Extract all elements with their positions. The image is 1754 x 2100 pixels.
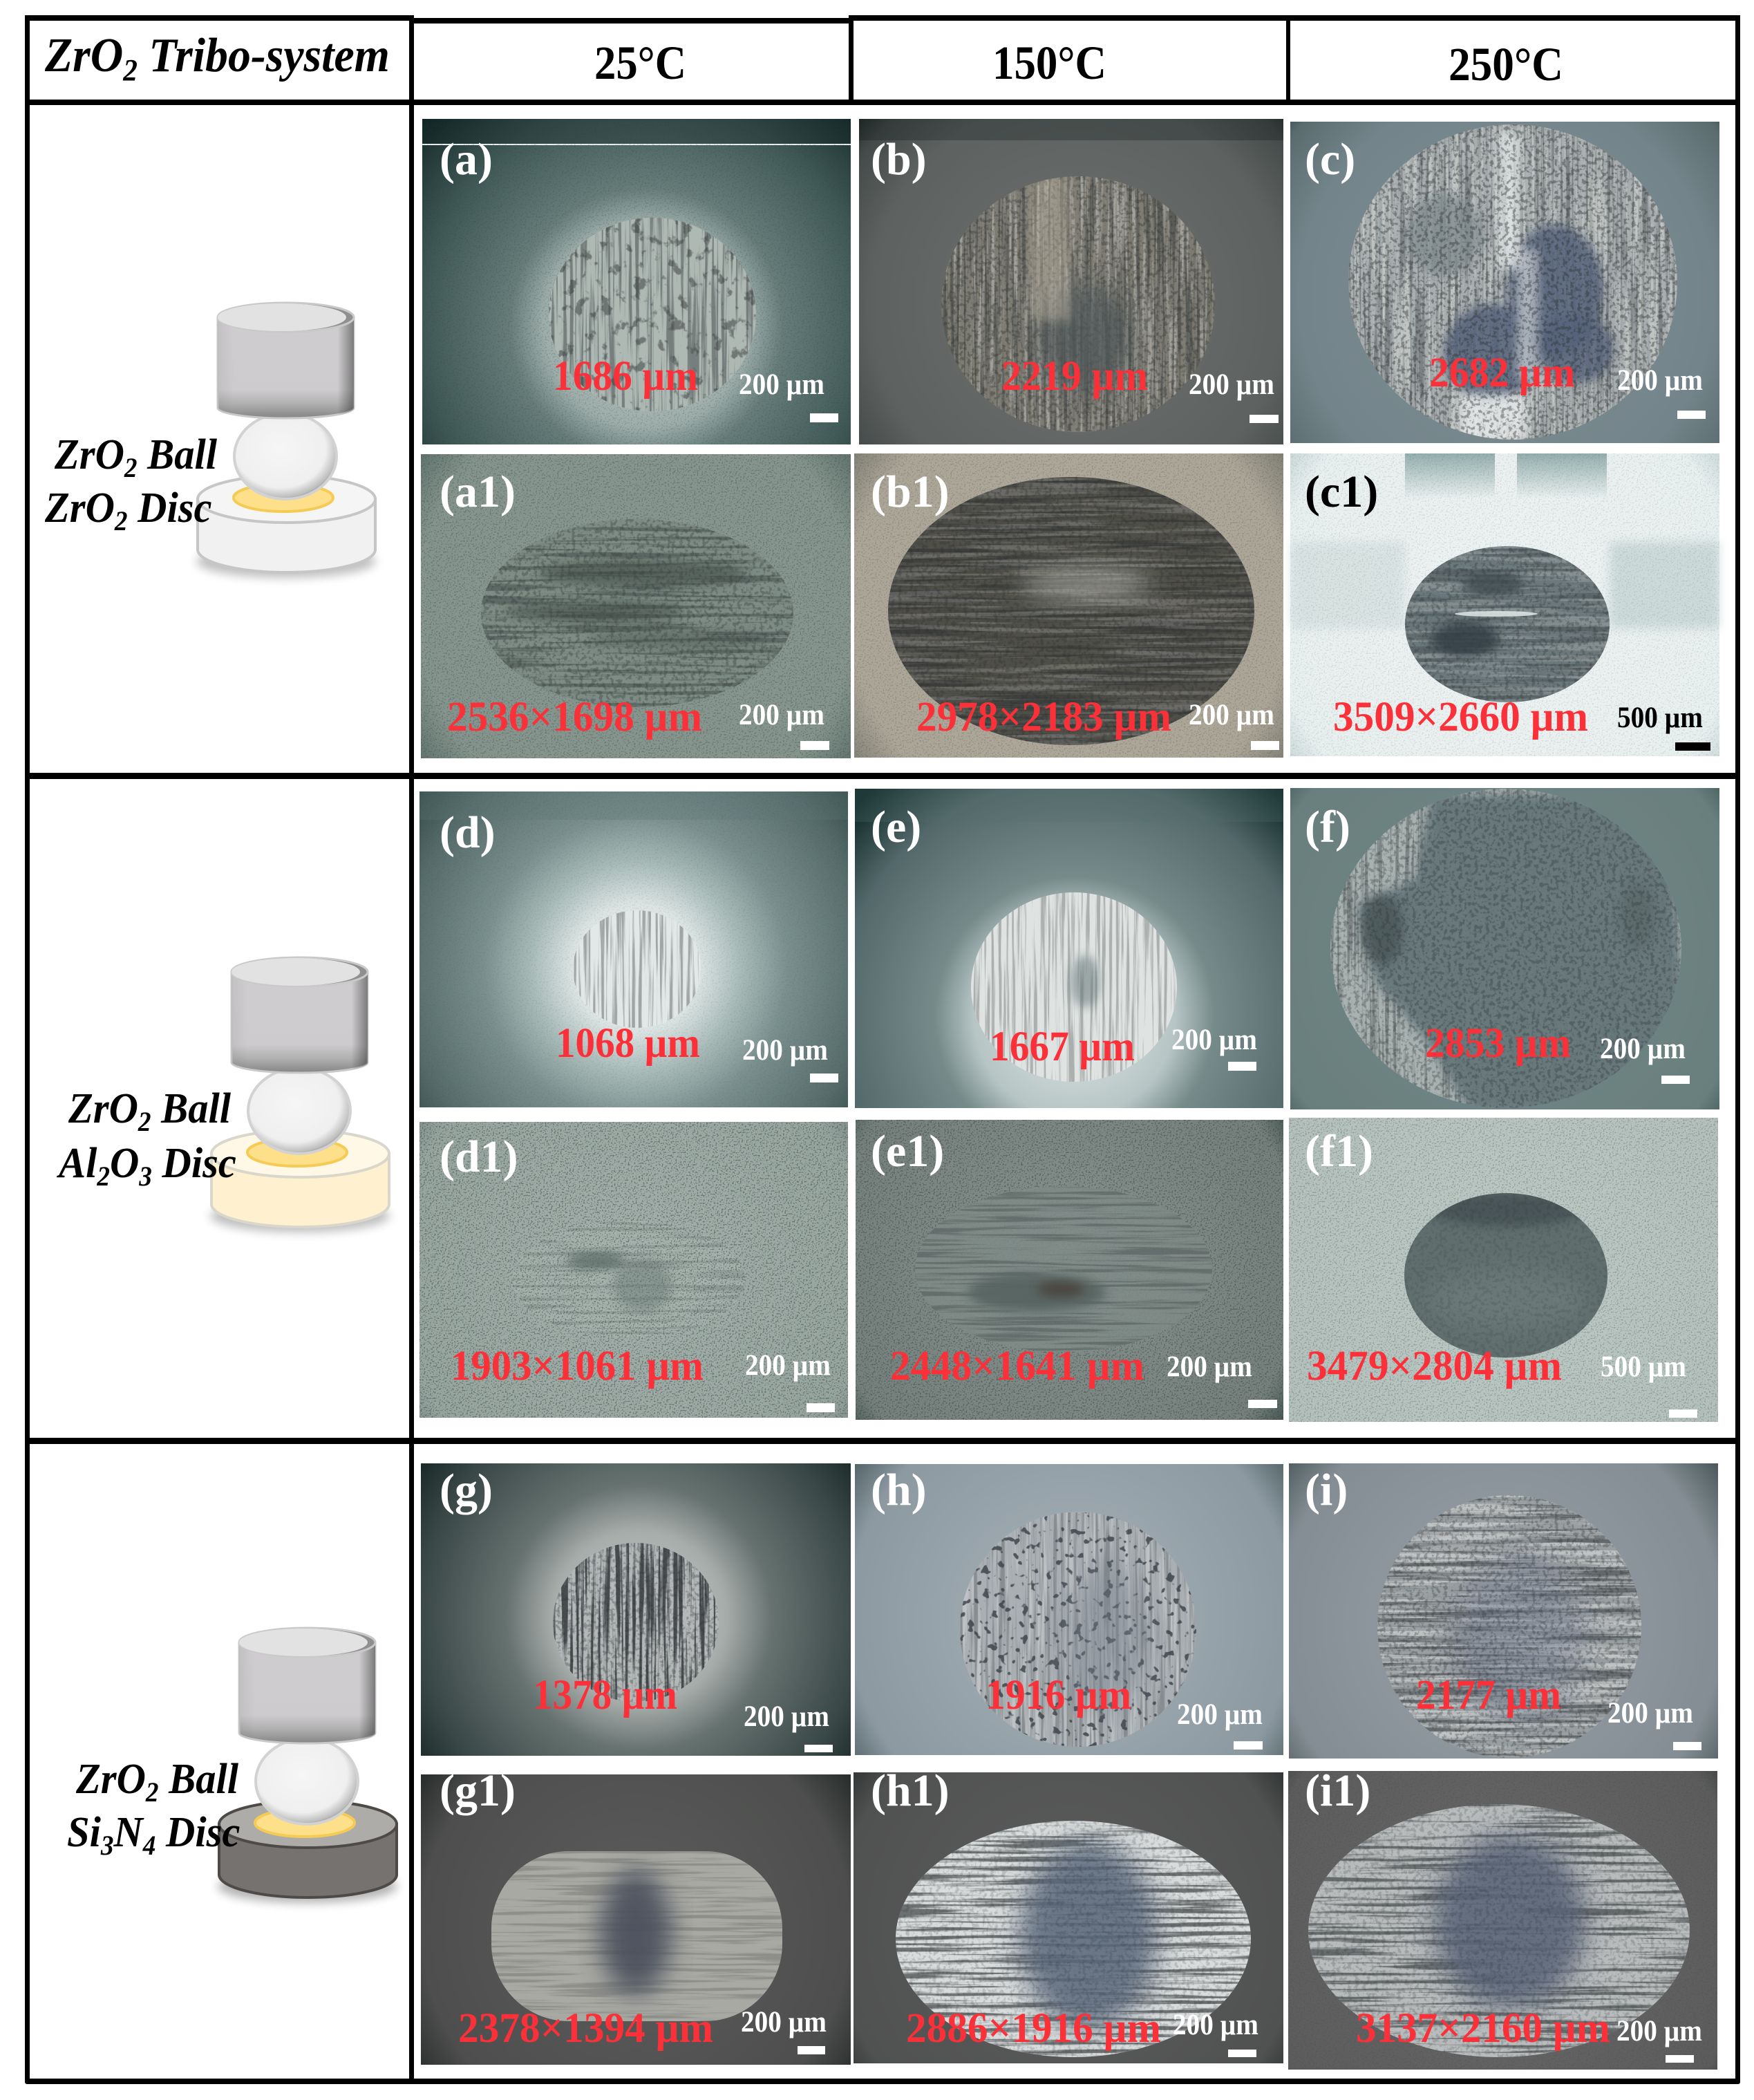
panel: micrograph (e1) (856, 1120, 1283, 1420)
label: ball and disc materials: 3 (100, 1831, 113, 1861)
measurement 2682 µm: 2682 µm (1429, 350, 1575, 396)
disc (198, 476, 375, 572)
label (a): (a) (440, 134, 493, 185)
label: ball and disc materials: ZrO (76, 1755, 146, 1803)
image: wear scar (d) (419, 791, 848, 1107)
panel: micrograph (h1) (854, 1765, 1283, 2063)
label (e1): (e1) (871, 1126, 944, 1176)
label: ball and disc materials: ZrO (55, 431, 124, 478)
measurement 1686 µm: 1686 µm (553, 353, 698, 400)
scale bar (1228, 2050, 1256, 2057)
label (g1): (g1) (440, 1765, 516, 1816)
holder cylinder (218, 303, 354, 418)
disc (219, 1801, 397, 1897)
panel: micrograph (h) (855, 1464, 1283, 1755)
panel: micrograph (c) (1290, 122, 1719, 443)
panel: micrograph (a) (422, 119, 851, 444)
scale text: 200 µm (739, 699, 824, 731)
disc (211, 1130, 389, 1227)
scale text: 200 µm (745, 1349, 831, 1382)
label (h): (h) (871, 1465, 927, 1515)
scale bar (1675, 742, 1710, 751)
image: wear scar (e1) (856, 1120, 1283, 1420)
scale text: 500 µm (1601, 1351, 1686, 1383)
label (a1): (a1) (440, 467, 516, 517)
label: ball and disc materials: 2 (145, 1778, 158, 1808)
label (f): (f) (1305, 802, 1350, 852)
scale bar (1666, 2055, 1694, 2063)
scale text: 200 µm (741, 2006, 827, 2038)
measurement 2219 µm: 2219 µm (1001, 353, 1148, 400)
scale text: 500 µm (1617, 702, 1703, 734)
scale text: 200 µm (1600, 1033, 1686, 1065)
scale text: 200 µm (1617, 364, 1703, 397)
label (e): (e) (871, 802, 921, 852)
scale bar (810, 413, 838, 422)
measurement 2978×2183 µm: 2978×2183 µm (916, 694, 1171, 740)
scale bar (1669, 1409, 1697, 1418)
label: ball and disc materials: Ball (158, 1755, 238, 1803)
panel: micrograph (d1) (419, 1122, 848, 1418)
label: ball and disc materials (67, 1755, 240, 1861)
label: ball and disc materials: 2 (114, 507, 127, 536)
label (d1): (d1) (440, 1132, 518, 1182)
panel: micrograph (f1) (1289, 1118, 1718, 1422)
scale text: 200 µm (1607, 1697, 1693, 1729)
measurement 3479×2804 µm: 3479×2804 µm (1307, 1343, 1562, 1389)
panel: micrograph (c1) (1290, 453, 1719, 756)
image: wear scar (f) (1290, 788, 1719, 1113)
measurement 3509×2660 µm: 3509×2660 µm (1333, 694, 1588, 740)
header: ZrO2 Tribo-system: ZrO (45, 28, 123, 82)
image: wear scar (f1) (1289, 1118, 1718, 1422)
scale text: 200 µm (1173, 2009, 1258, 2041)
scale text: 200 µm (1171, 1024, 1257, 1056)
scale text: 200 µm (742, 1034, 828, 1067)
panel: micrograph (g) (421, 1463, 851, 1756)
measurement 1667 µm: 1667 µm (990, 1024, 1135, 1070)
image: wear scar (i) (1289, 1463, 1718, 1759)
label: ball and disc materials (44, 431, 217, 536)
label: ball and disc materials: Ball (137, 431, 217, 478)
ball (234, 413, 337, 499)
scale bar (798, 2046, 825, 2054)
image: wear scar (i1) (1288, 1771, 1717, 2070)
label: ball and disc materials: ZrO (68, 1085, 138, 1132)
scale text: 200 µm (1616, 2015, 1702, 2047)
scale bar (1234, 1741, 1263, 1750)
label (d): (d) (440, 807, 496, 858)
scale text: 200 µm (1189, 368, 1274, 401)
image: wear scar (c) (1290, 122, 1719, 443)
scale bar (1248, 1400, 1277, 1408)
scale text: 200 µm (744, 1700, 829, 1733)
label (i): (i) (1305, 1465, 1348, 1515)
ball (248, 1068, 350, 1154)
panel: micrograph (f) (1290, 788, 1719, 1113)
image: wear scar (c1) (1290, 453, 1719, 756)
measurement 1378 µm: 1378 µm (533, 1672, 677, 1718)
scale text: 200 µm (1177, 1698, 1263, 1731)
label: ball and disc materials: Si (67, 1808, 101, 1856)
scale bar (1250, 415, 1279, 423)
measurement 2378×1394 µm: 2378×1394 µm (458, 2005, 713, 2052)
panel: micrograph (d) (419, 791, 848, 1107)
scale bar (810, 1074, 838, 1082)
panel: micrograph (b) (859, 119, 1283, 444)
scale bar (800, 741, 829, 750)
label (g): (g) (440, 1465, 493, 1515)
image: wear scar (b) (859, 119, 1283, 444)
holder cylinder (239, 1628, 375, 1743)
label (b): (b) (871, 134, 927, 185)
panel: micrograph (a1) (421, 454, 851, 758)
image: wear scar (h) (855, 1464, 1283, 1755)
label: ball and disc materials: Disc (127, 484, 212, 532)
scale bar (804, 1745, 833, 1752)
scale bar (1661, 1076, 1690, 1084)
measurement 2177 µm: 2177 µm (1416, 1672, 1561, 1718)
measurement 1068 µm: 1068 µm (556, 1020, 700, 1067)
image: wear scar (h1) (854, 1772, 1283, 2063)
image: wear scar (g1) (421, 1774, 851, 2065)
label: ball and disc materials: 2 (138, 1107, 151, 1137)
label (c1): (c1) (1305, 467, 1378, 517)
image: wear scar (e) (855, 789, 1283, 1108)
label: ball and disc materials (56, 1085, 236, 1192)
header: ZrO2 Tribo-system: Tribo-system (138, 28, 390, 82)
label (f1): (f1) (1305, 1126, 1373, 1176)
label: ball and disc materials: O (110, 1139, 139, 1187)
label: ball and disc materials: 2 (124, 453, 137, 483)
scale bar (1228, 1062, 1256, 1071)
image: wear scar (b1) (854, 453, 1283, 758)
header: 150°C: 150°C (992, 37, 1106, 89)
measurement 2448×1641 µm: 2448×1641 µm (890, 1343, 1144, 1389)
header: 250°C: 250°C (1449, 38, 1563, 91)
scale bar (1677, 411, 1706, 419)
illustration: ZrO2 ball on ZrO2 disc (44, 303, 376, 578)
label: ball and disc materials: ZrO (45, 484, 115, 532)
panel: micrograph (b1) (854, 453, 1283, 758)
ball (256, 1738, 358, 1824)
contact area (247, 1138, 347, 1166)
measurement 3137×2160 µm: 3137×2160 µm (1356, 2005, 1610, 2052)
contact area (255, 1809, 355, 1837)
scale text: 200 µm (1167, 1351, 1252, 1383)
label: ball and disc materials: Al (59, 1139, 97, 1187)
measurement 2536×1698 µm: 2536×1698 µm (447, 694, 702, 740)
label (b1): (b1) (871, 467, 950, 517)
label (h1): (h1) (871, 1765, 950, 1816)
label (c): (c) (1305, 134, 1355, 185)
illustration: ZrO2 ball on Si3N4 disc (67, 1628, 397, 1903)
label: ball and disc materials: Disc (152, 1139, 236, 1187)
scale text: 200 µm (1189, 699, 1274, 731)
label (i1): (i1) (1305, 1765, 1370, 1816)
contact area (234, 484, 333, 512)
panel: micrograph (i1) (1288, 1765, 1717, 2070)
scale bar (1251, 741, 1279, 750)
scale bar (807, 1403, 835, 1412)
label: ball and disc materials: Disc (155, 1808, 240, 1856)
measurement 2853 µm: 2853 µm (1425, 1020, 1571, 1067)
image: wear scar (a1) (421, 454, 851, 758)
scale bar (1673, 1742, 1701, 1750)
label: ball and disc materials: N (113, 1808, 144, 1856)
measurement 2886×1916 µm: 2886×1916 µm (906, 2005, 1161, 2052)
label: ball and disc materials: 4 (142, 1831, 155, 1861)
label: ball and disc materials: Ball (151, 1085, 231, 1132)
image: wear scar (g) (421, 1463, 851, 1756)
panel: micrograph (g1) (421, 1765, 851, 2065)
label: ball and disc materials: 2 (96, 1162, 110, 1192)
measurement 1916 µm: 1916 µm (986, 1672, 1131, 1718)
label: ball and disc materials: 3 (138, 1162, 152, 1192)
header: ZrO2 Tribo-system: 2 (122, 54, 138, 87)
panel: micrograph (i) (1289, 1463, 1718, 1759)
image: wear scar (a) (422, 119, 851, 444)
header: 25°C: 25°C (594, 37, 686, 89)
measurement 1903×1061 µm: 1903×1061 µm (451, 1343, 704, 1389)
holder cylinder (232, 957, 368, 1073)
scale text: 200 µm (739, 368, 824, 401)
panel: micrograph (e) (855, 789, 1283, 1108)
image: wear scar (d1) (419, 1122, 848, 1418)
illustration: ZrO2 ball on Al2O3 disc (56, 957, 390, 1232)
